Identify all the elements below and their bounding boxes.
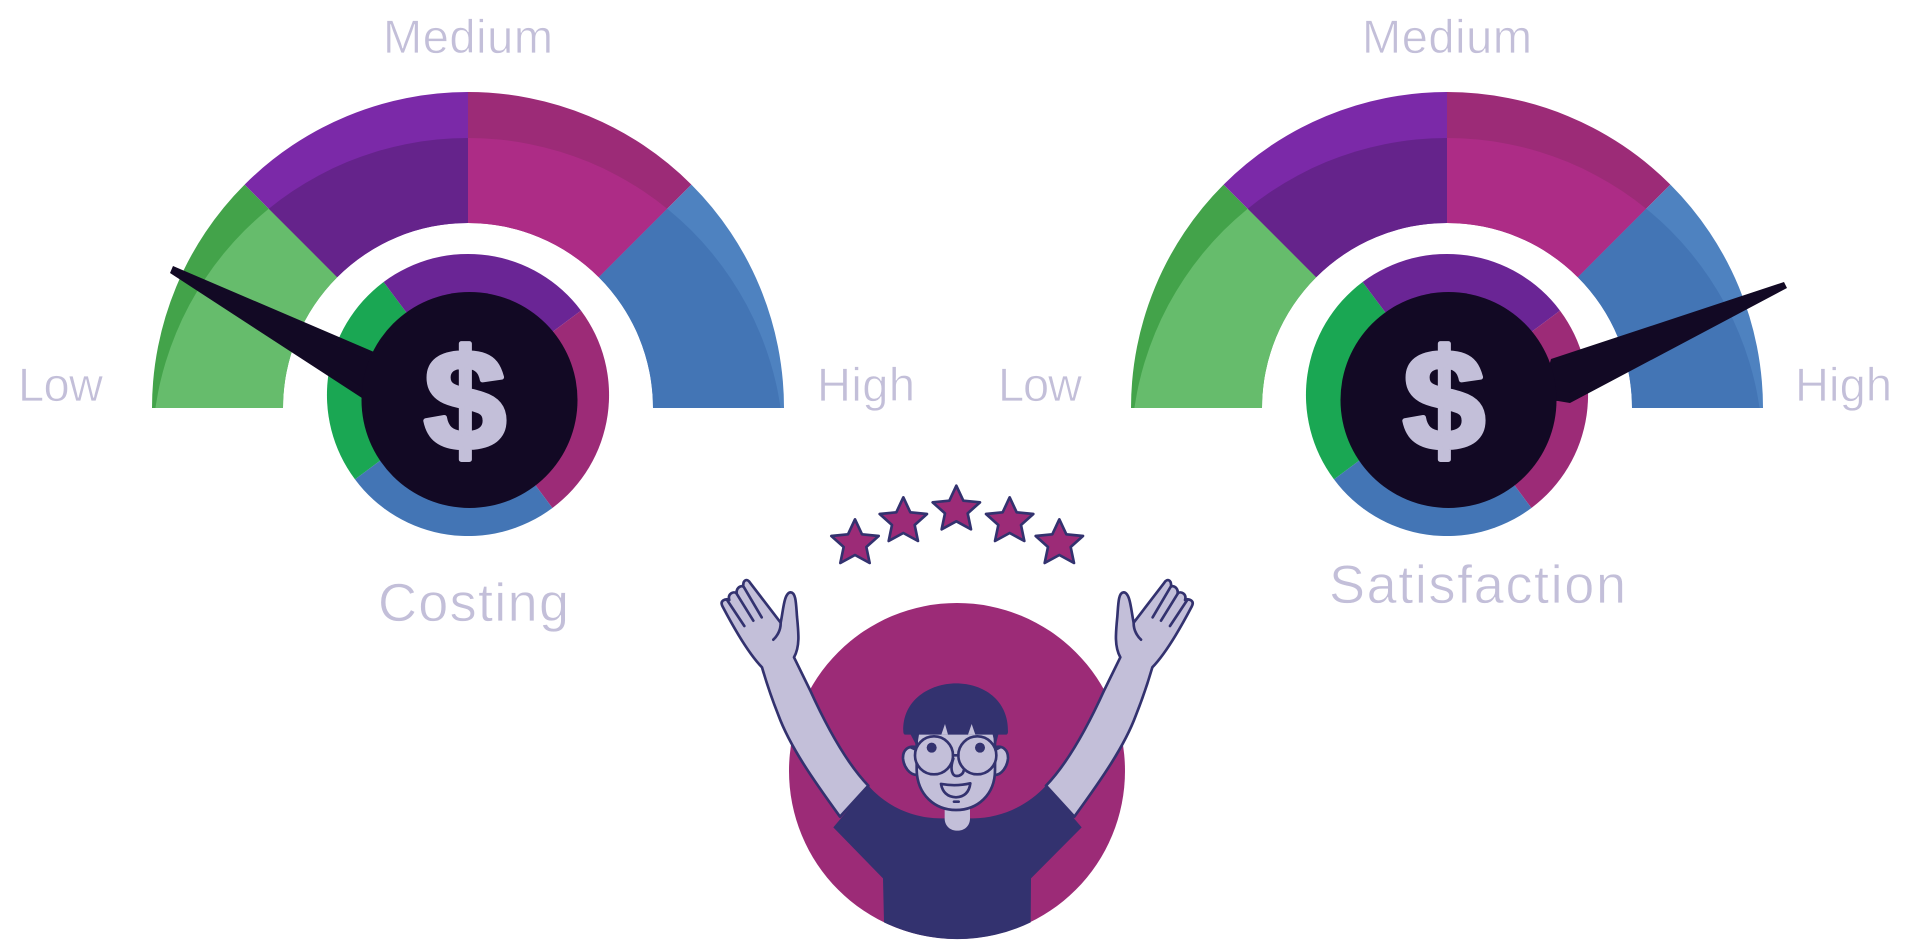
label: medium: Medium [1362, 10, 1532, 63]
head [903, 683, 1008, 810]
dial ring [327, 254, 609, 536]
hair [903, 683, 1008, 747]
label: high: High [817, 358, 915, 411]
dial hub [362, 292, 578, 508]
left arm and hand [722, 580, 868, 817]
five star rating [831, 486, 1083, 563]
gauge arc: outer band [152, 92, 784, 408]
gauge arc: outer band [1131, 92, 1763, 408]
label: medium: Medium [383, 10, 553, 63]
needle pointing high [1540, 282, 1787, 403]
label: low: Low [18, 358, 104, 411]
panel: costing gauge [18, 10, 915, 633]
nose [952, 759, 964, 776]
label: satisfaction: Satisfaction [1329, 555, 1626, 615]
eyes [927, 743, 985, 753]
gauge arc: inner segments [1134, 138, 1760, 408]
mouth [941, 783, 970, 797]
needle pointing low [170, 266, 374, 398]
icon: dollar sign: $ [1403, 321, 1485, 479]
fringe notches [941, 724, 975, 735]
t-shirt [833, 786, 1082, 939]
gauge arc: inner segments [156, 138, 780, 408]
backdrop circle [789, 603, 1125, 939]
neck [945, 807, 970, 831]
glasses [911, 736, 1000, 774]
label: low: Low [998, 358, 1083, 411]
ears [903, 747, 1008, 775]
dial hub [1340, 292, 1556, 508]
right arm and hand [1046, 580, 1193, 817]
icon: dollar sign: $ [424, 321, 506, 479]
face [917, 730, 995, 810]
dial ring [1306, 254, 1588, 536]
label: costing: Costing [378, 573, 569, 633]
panel: satisfaction gauge [998, 10, 1892, 615]
illustration: happy person with stars [722, 486, 1193, 939]
chin mark [954, 798, 959, 806]
label: high: High [1795, 358, 1892, 411]
